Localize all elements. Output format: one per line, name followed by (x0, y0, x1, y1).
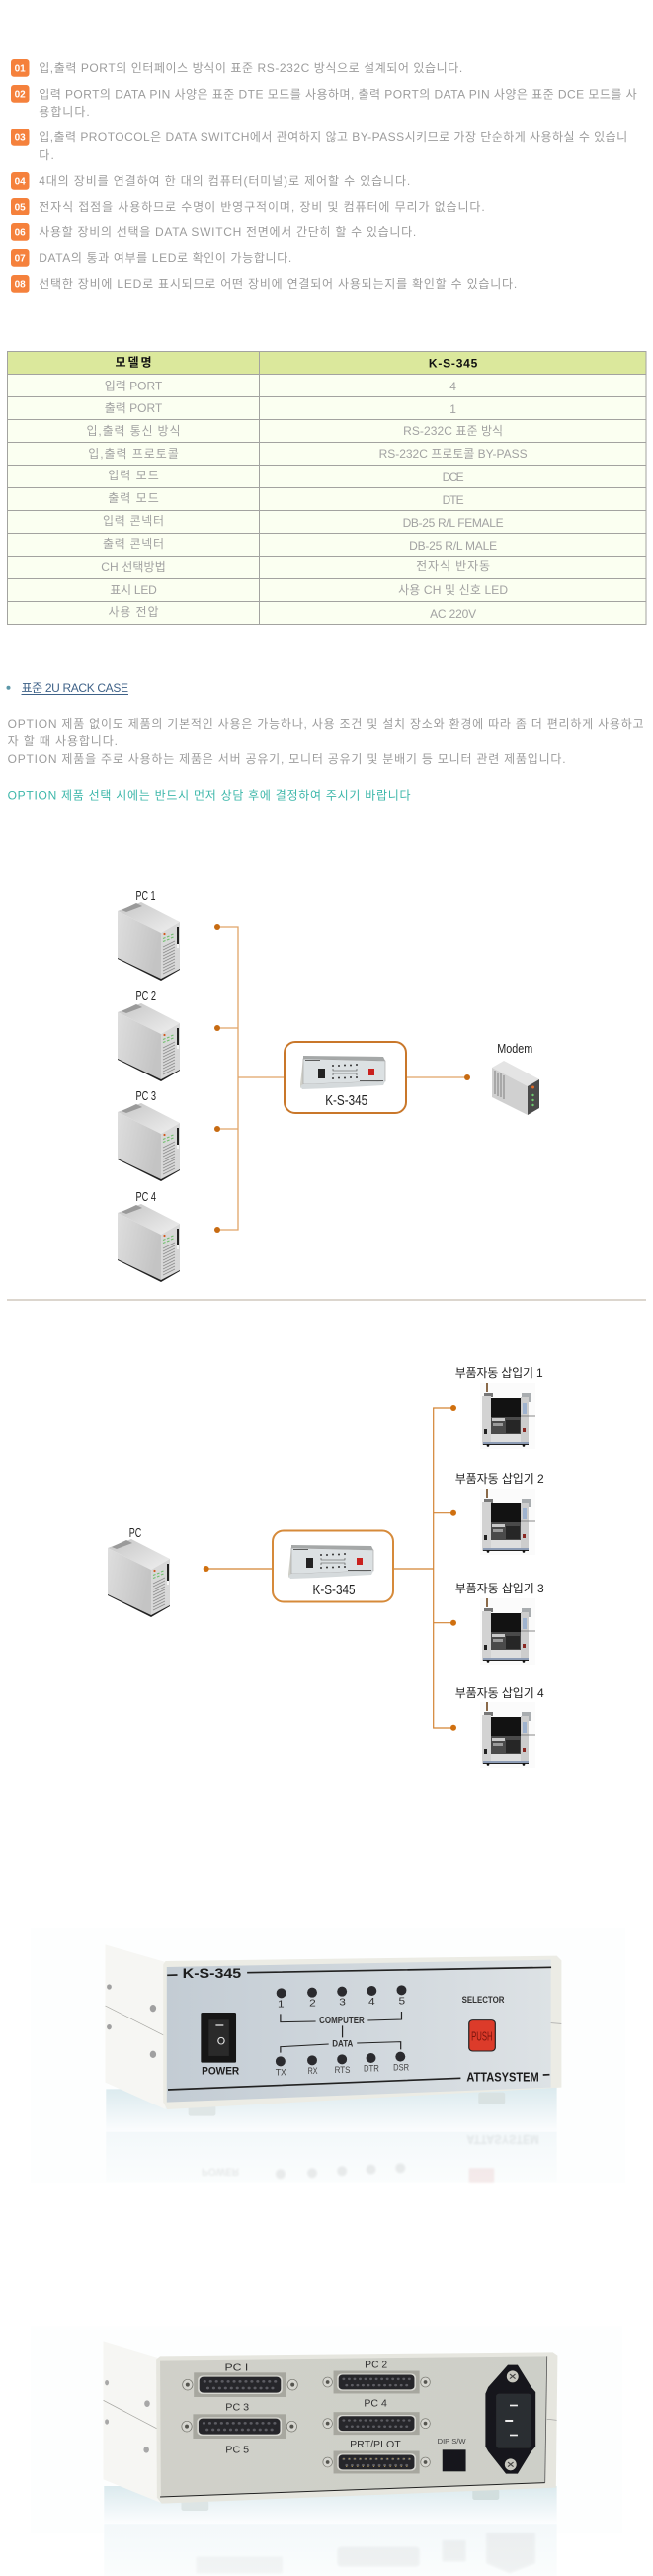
PC 4 (118, 1189, 180, 1282)
PC 2: PC 2 (136, 988, 156, 1003)
table rows: 입력 PORT (105, 380, 163, 393)
PC: PC (129, 1525, 141, 1540)
feature 06: 사용할 장비의 선택을 DATA SWITCH 전면에서 간단히 할 수 있습니다. (39, 225, 416, 239)
table rows: 전자식 반자동 (416, 559, 490, 573)
feature 06: 06 (15, 227, 26, 239)
port labels (225, 2360, 401, 2455)
feature 04: 04 (15, 176, 26, 188)
feature 03: 다. (39, 148, 54, 162)
option notice: OPTION 제품 선택 시에는 반드시 먼저 상담 후에 결정하여 주시기 바랍니다 (8, 789, 411, 803)
power switch (201, 2013, 239, 2077)
data LEDs: DSR (393, 2063, 409, 2073)
feature 02 (11, 85, 637, 119)
table rows: 1 (449, 402, 456, 416)
data LEDs: RTS (335, 2066, 351, 2076)
data LEDs: DTR (364, 2064, 379, 2074)
divider (7, 1299, 646, 1301)
modem (492, 1041, 539, 1115)
option heading: 표준 2U RACK CASE (22, 681, 128, 695)
case side (106, 1944, 166, 2109)
photo: front of K-S-345 (31, 1928, 625, 2183)
connector lines (206, 1408, 453, 1728)
feature 05: 05 (15, 202, 26, 214)
table rows: 입,출력 통신 방식 (87, 424, 180, 438)
table rows: 입력 콘넥터 (103, 514, 164, 528)
table rows: 출력 콘넥터 (103, 537, 164, 551)
connector dots (204, 1405, 456, 1731)
feature list (11, 59, 637, 293)
table header: K-S-345 (429, 356, 478, 370)
rear frame (156, 2352, 557, 2504)
table rows: 표시 LED (110, 583, 157, 597)
option description (8, 717, 644, 766)
feature 03: 입,출력 PROTOCOL은 DATA SWITCH에서 관여하지 않고 BY-PASS시키므로 가장 단순하게 사용하실 수 있습니 (39, 130, 627, 144)
port labels: PC 5 (225, 2445, 249, 2455)
brand text: ATTASYSTEM (466, 2071, 539, 2085)
table rows: 사용 전압 (109, 605, 158, 619)
mounter 1 (455, 1366, 543, 1449)
table rows: 입,출력 프로토콜 (88, 447, 179, 461)
K-S-345 device box (273, 1530, 393, 1601)
feature 04: 4대의 장비를 연결하여 한 대의 컴퓨터(터미널)로 제어할 수 있습니다. (39, 174, 410, 188)
diagram: four PCs to modem (118, 888, 539, 1282)
computer LEDs: 5 (399, 1996, 405, 2007)
PC 1: PC 1 (136, 888, 156, 902)
computer LEDs: 4 (368, 1997, 375, 2008)
feature 03: 03 (15, 132, 26, 144)
PC 3: PC 3 (136, 1088, 156, 1103)
table rows: DTE (443, 493, 464, 507)
computer LEDs: 2 (309, 1998, 316, 2009)
dip switch (438, 2438, 466, 2471)
PC (108, 1525, 170, 1617)
ports (182, 2371, 430, 2439)
connector lines (217, 927, 467, 1230)
table rows: DB-25 R/L MALE (409, 539, 497, 553)
table rows: RS-232C 표준 방식 (403, 424, 503, 438)
feature 02: 02 (15, 89, 26, 101)
K-S-345 device box: K-S-345 (312, 1583, 356, 1598)
selector: SELECTOR (462, 1996, 504, 2006)
connector dots (214, 924, 470, 1233)
feature 01: 01 (15, 63, 26, 75)
computer bracket (281, 2012, 401, 2053)
feature 07: DATA의 통과 여부를 LED로 확인이 가능합니다. (39, 251, 291, 265)
modem: Modem (497, 1041, 532, 1056)
K-S-345 device box (285, 1042, 406, 1113)
computer LEDs: 1 (278, 1999, 285, 2010)
feature 02: 입력 PORT의 DATA PIN 사양은 표준 DTE 모드를 사용하며, 출력 PORT의 DATA PIN 사양은 표준 DCE 모드를 사 (39, 87, 637, 101)
photo: rear of K-S-345 (31, 2326, 622, 2576)
selector (462, 1996, 504, 2051)
model text: K-S-345 (183, 1966, 242, 1982)
front frame (163, 1956, 561, 2109)
feature 08: 08 (15, 279, 26, 291)
table rows: 사용 CH 및 신호 LED (398, 583, 508, 597)
computer LEDs: 3 (339, 1997, 346, 2008)
computer LEDs (277, 1985, 406, 2010)
table rows: 4 (449, 380, 456, 393)
case side (104, 2341, 160, 2503)
PC 1 (118, 888, 180, 981)
feature 05: 전자식 접점을 사용하므로 수명이 반영구적이며, 장비 및 컴퓨터에 무리가 없습니다. (39, 200, 485, 214)
reflection (197, 2533, 535, 2573)
data LEDs: RX (308, 2067, 318, 2077)
table rows: 출력 PORT (105, 401, 163, 415)
mounter 2: 부품자동 삽입기 2 (455, 1472, 544, 1486)
photo: front of K-S-345: COMPUTER (319, 2016, 365, 2026)
feet (181, 2501, 208, 2511)
reflection: ATTASYSTEM (466, 2131, 539, 2146)
option description: OPTION 제품 없이도 제품의 기본적인 사용은 가능하나, 사용 조건 및 설치 장소와 환경에 따라 좀 더 편리하게 사용하고 (8, 717, 644, 730)
reflection (202, 2131, 539, 2183)
table rows (87, 380, 528, 621)
table rows: 출력 모드 (108, 491, 159, 505)
table rows: 입력 모드 (108, 469, 159, 482)
table rows: CH 선택방법 (101, 560, 166, 574)
port labels: PC 2 (365, 2360, 387, 2370)
mounter 4: 부품자동 삽입기 4 (455, 1686, 544, 1700)
specification table (8, 352, 646, 625)
data LEDs: TX (276, 2068, 286, 2078)
feature 03 (11, 129, 627, 162)
feature 08: 선택한 장비에 LED로 표시되므로 어떤 장비에 연결되어 사용되는지를 확인할 수 있습니다. (39, 277, 517, 291)
diagram: PC to four mounters (108, 1366, 544, 1768)
K-S-345 device box: K-S-345 (325, 1093, 367, 1109)
port labels: PRT/PLOT (350, 2440, 401, 2450)
dip switch: DIP S/W (438, 2438, 466, 2446)
option description: OPTION 제품을 주로 사용하는 제품은 서버 공유기, 모니터 공유기 및 분배기 등 모니터 관련 제품입니다. (8, 752, 566, 766)
port labels: PC 4 (364, 2398, 387, 2409)
feet (189, 2105, 215, 2116)
feature 07: 07 (15, 253, 26, 265)
table rows: DB-25 R/L FEMALE (403, 516, 504, 530)
mounter 3 (455, 1582, 544, 1665)
power switch: POWER (202, 2064, 239, 2077)
mounter 4 (455, 1686, 544, 1768)
table header (115, 356, 478, 370)
mounter 2 (455, 1472, 544, 1555)
table rows: AC 220V (430, 607, 476, 621)
PC 2 (118, 988, 180, 1081)
table rows: DCE (443, 471, 464, 484)
port labels: PC I (225, 2362, 248, 2373)
option description: 자 할 때 사용합니다. (8, 734, 118, 748)
mounter 3: 부품자동 삽입기 3 (455, 1582, 544, 1595)
printer port (323, 2451, 430, 2473)
feature 01: 입,출력 PORT의 인터페이스 방식이 표준 RS-232C 방식으로 설계되어 있습니다. (39, 61, 462, 75)
power inlet (485, 2365, 535, 2474)
mounter 1: 부품자동 삽입기 1 (455, 1366, 543, 1380)
table rows: RS-232C 프로토콜 BY-PASS (379, 447, 528, 461)
selector: PUSH (471, 2028, 493, 2043)
reflection: POWER (202, 2166, 239, 2178)
data LEDs (276, 2052, 409, 2078)
feature 02: 용합니다. (39, 105, 90, 119)
PC 3 (118, 1088, 180, 1181)
port labels: PC 3 (225, 2402, 249, 2413)
PC 4: PC 4 (136, 1189, 156, 1204)
photo: front of K-S-345: DATA (332, 2039, 354, 2049)
front rules (167, 1967, 551, 2090)
table header: 모델명 (115, 356, 152, 370)
